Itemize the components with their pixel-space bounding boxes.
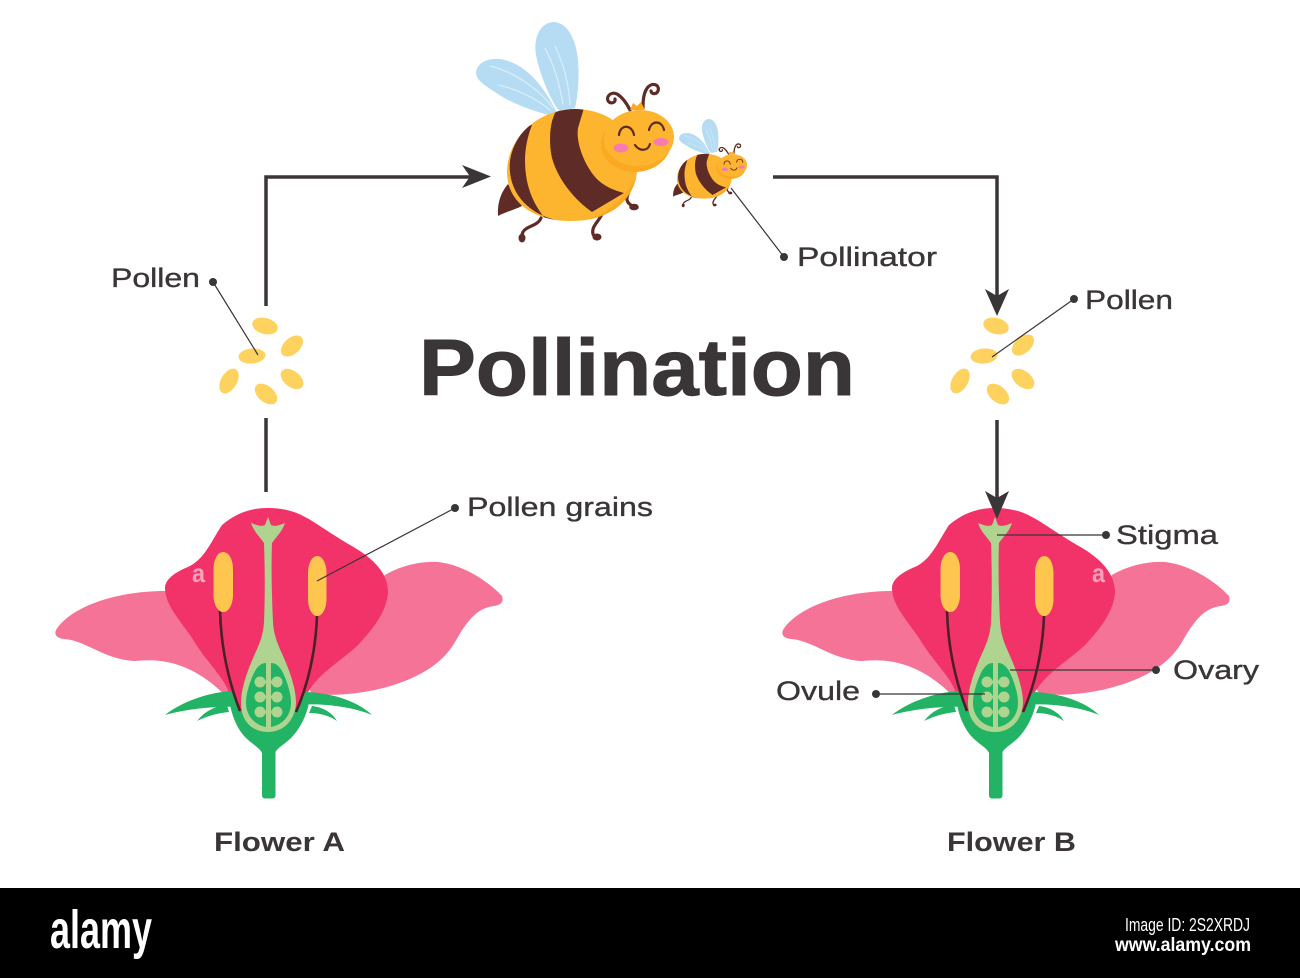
caption: flower A: Flower A	[214, 827, 345, 857]
label: ovule	[776, 676, 985, 706]
label: pollen left	[111, 263, 258, 355]
label: pollen right	[992, 285, 1173, 357]
icon: small bee	[673, 119, 748, 207]
arrow: pollinator to pollen B	[773, 177, 1009, 316]
caption: flower B: Flower B	[947, 827, 1076, 857]
label: stigma	[997, 520, 1219, 550]
footer bar	[0, 888, 1300, 978]
label: stigma: Stigma	[1116, 520, 1219, 550]
label: ovary: Ovary	[1173, 655, 1260, 685]
arrow: flower A to pollen	[264, 418, 268, 492]
website: www.alamy.com	[1114, 935, 1251, 956]
label: pollinator	[731, 188, 937, 272]
label: pollen grains: Pollen grains	[467, 492, 653, 522]
label: ovule: Ovule	[776, 676, 860, 706]
label: pollinator: Pollinator	[797, 242, 937, 272]
pollen cluster A	[215, 315, 307, 408]
icon: large bee	[476, 22, 676, 242]
pollen cluster B	[946, 315, 1038, 408]
alamy logo: alamy	[50, 900, 152, 960]
flower B diagram	[782, 508, 1230, 798]
label: pollen right: Pollen	[1085, 285, 1173, 315]
arrow: pollen to pollinator	[266, 165, 491, 306]
label: ovary	[1010, 655, 1260, 685]
arrow: pollen B to flower B	[985, 420, 1009, 519]
label: pollen left: Pollen	[111, 263, 200, 293]
watermark on flower A: a	[192, 558, 205, 588]
watermark on flower B: a	[1092, 558, 1105, 588]
image id: Image ID: 2S2XRDJ	[1125, 915, 1250, 935]
label: pollen grains	[317, 492, 653, 581]
title: Pollination	[419, 323, 855, 412]
flower A diagram	[55, 508, 503, 798]
